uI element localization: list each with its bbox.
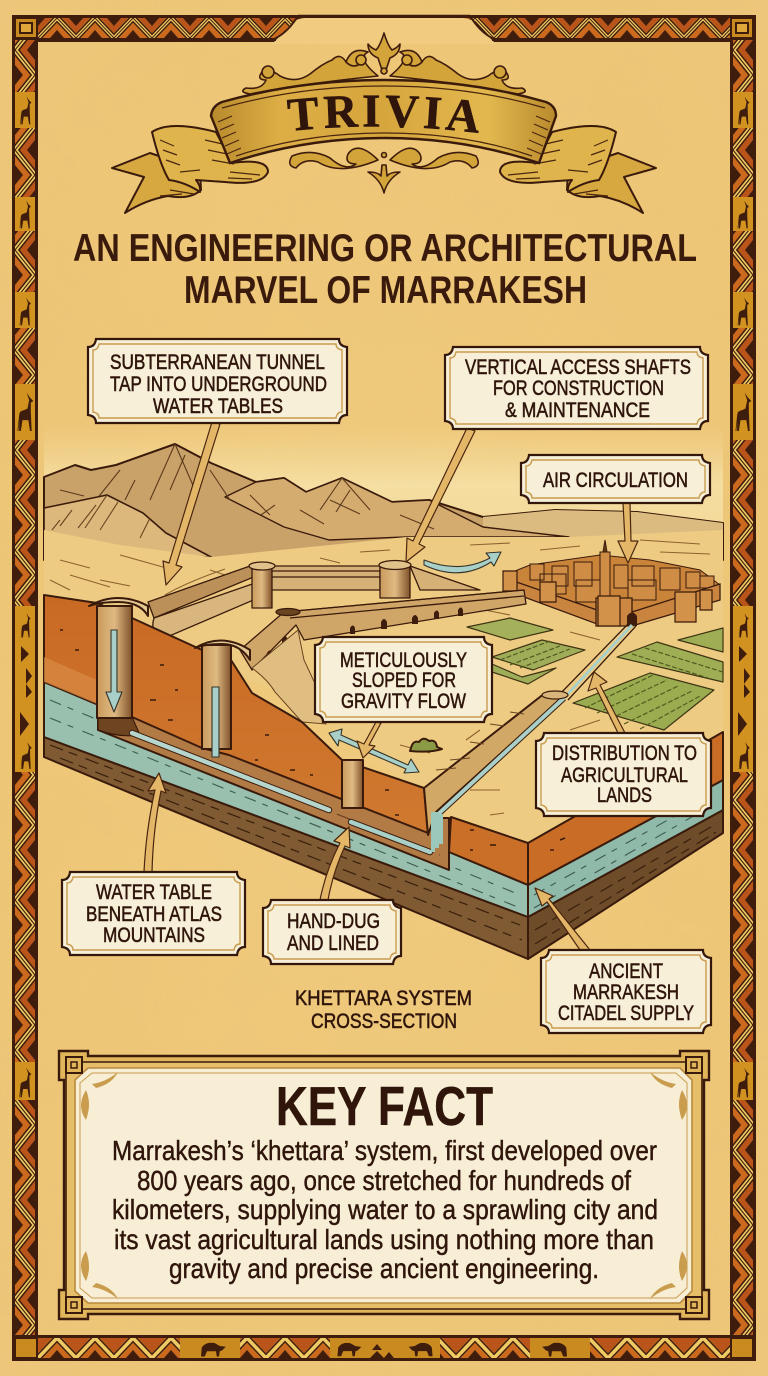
border: right column — [730, 40, 756, 1337]
water flowing in tunnel — [132, 733, 430, 852]
right ribbon tail — [500, 126, 656, 213]
main title — [73, 227, 697, 312]
arrow: citadel supply — [535, 888, 590, 950]
border: left column — [12, 40, 38, 1337]
arrow: gravity flow — [357, 722, 381, 758]
distant mountains — [44, 444, 723, 560]
khettara cross-section illustration — [44, 425, 723, 959]
rubble under the walls — [252, 630, 326, 724]
callout: meticulously sloped — [315, 637, 492, 722]
callout: distribution: AGRICULTURAL — [561, 764, 688, 787]
callout arrows — [144, 422, 638, 950]
callout: vertical access shafts: FOR CONSTRUCTION — [493, 377, 664, 400]
border: bottom band with animals — [12, 1335, 756, 1361]
panel frame — [59, 1051, 709, 1319]
bushes — [410, 739, 442, 752]
callout: citadel supply: ANCIENT — [589, 960, 663, 983]
shaft one down arrow — [106, 630, 122, 712]
diagram caption: CROSS-SECTION — [311, 1010, 457, 1033]
callout: subterranean tunnel — [88, 339, 347, 423]
green fields — [467, 618, 723, 730]
callout: hand-dug — [263, 900, 401, 964]
panel: key fact — [59, 1051, 709, 1319]
bottom ornament — [290, 148, 478, 193]
callout: air circulation — [521, 455, 710, 503]
brown bedrock layer — [44, 737, 723, 959]
key fact body: kilometers, supplying water to a sprawling city and — [112, 1194, 658, 1225]
aqueduct walls and access towers — [148, 560, 526, 670]
callout: distribution: DISTRIBUTION TO — [552, 742, 697, 765]
callout: hand-dug: HAND-DUG — [287, 910, 380, 933]
key fact heading: KEY FACT — [276, 1075, 493, 1137]
diagram caption: KHETTARA SYSTEM — [295, 987, 472, 1010]
water table layer — [44, 682, 723, 917]
arrow: distribution — [588, 672, 625, 733]
top ornament — [243, 33, 525, 94]
callout: water table: BENEATH ATLAS — [86, 903, 222, 926]
key fact body: 800 years ago, once stretched for hundreds of — [137, 1165, 631, 1196]
shaft two water stripe — [212, 687, 219, 757]
banner word: TRIVIA: TRIVIA — [286, 95, 479, 134]
border: top band — [12, 15, 756, 44]
key fact body: gravity and precise ancient engineering. — [169, 1253, 599, 1284]
key fact body: Marrakesh’s ‘khettara’ system, first developed over — [112, 1135, 657, 1166]
key fact body: its vast agricultural lands using nothing more than — [114, 1224, 654, 1255]
callout: vertical access shafts: & MAINTENANCE — [505, 399, 650, 422]
marrakesh city and walls — [503, 540, 720, 626]
orange earth layer — [44, 595, 723, 885]
arrow: hand-dug — [320, 827, 350, 900]
callout: water table: MOUNTAINS — [103, 924, 205, 947]
main ribbon band — [211, 80, 556, 163]
callout: air circulation: AIR CIRCULATION — [543, 469, 688, 492]
callout: subterranean tunnel: WATER TABLES — [153, 395, 283, 418]
key fact body — [112, 1135, 658, 1284]
arrow: water table — [144, 773, 166, 872]
diagram caption — [295, 987, 472, 1033]
left ribbon tail — [112, 126, 268, 213]
gravity flow double arrow — [329, 729, 419, 773]
callout: citadel supply: MARRAKESH — [573, 981, 679, 1004]
callout: hand-dug: AND LINED — [287, 932, 379, 955]
callout: meticulously sloped: METICULOUSLY — [340, 649, 467, 672]
air flow arrow — [424, 552, 501, 573]
callout: water table — [62, 872, 245, 955]
arrow: subterranean tunnel — [163, 422, 220, 585]
callout: distribution — [536, 733, 711, 816]
vertical shafts — [89, 598, 363, 808]
callout: subterranean tunnel: SUBTERRANEAN TUNNEL — [110, 351, 325, 374]
callout: meticulously sloped: GRAVITY FLOW — [341, 690, 466, 713]
callout: water table: WATER TABLE — [96, 881, 212, 904]
callout: distribution: LANDS — [597, 784, 652, 807]
callout: vertical access shafts — [445, 347, 708, 429]
callout: citadel supply — [541, 950, 711, 1033]
aqueduct arches — [266, 608, 463, 666]
tunnel lining — [98, 714, 449, 870]
distribution channel — [424, 624, 636, 852]
callout: meticulously sloped: SLOPED FOR — [352, 669, 456, 692]
arrow: air circulation — [618, 503, 638, 563]
sky — [44, 425, 723, 595]
callout: vertical access shafts: VERTICAL ACCESS SHAFTS — [465, 356, 691, 379]
arrow: vertical shafts — [406, 428, 475, 562]
callout: subterranean tunnel: TAP INTO UNDERGROUND — [110, 373, 327, 396]
main title: MARVEL OF MARRAKESH — [184, 269, 587, 312]
trivia ribbon banner — [111, 32, 657, 214]
desert sketch lines — [50, 540, 710, 815]
desert ground — [44, 530, 723, 843]
callout: citadel supply: CITADEL SUPPLY — [558, 1002, 694, 1025]
